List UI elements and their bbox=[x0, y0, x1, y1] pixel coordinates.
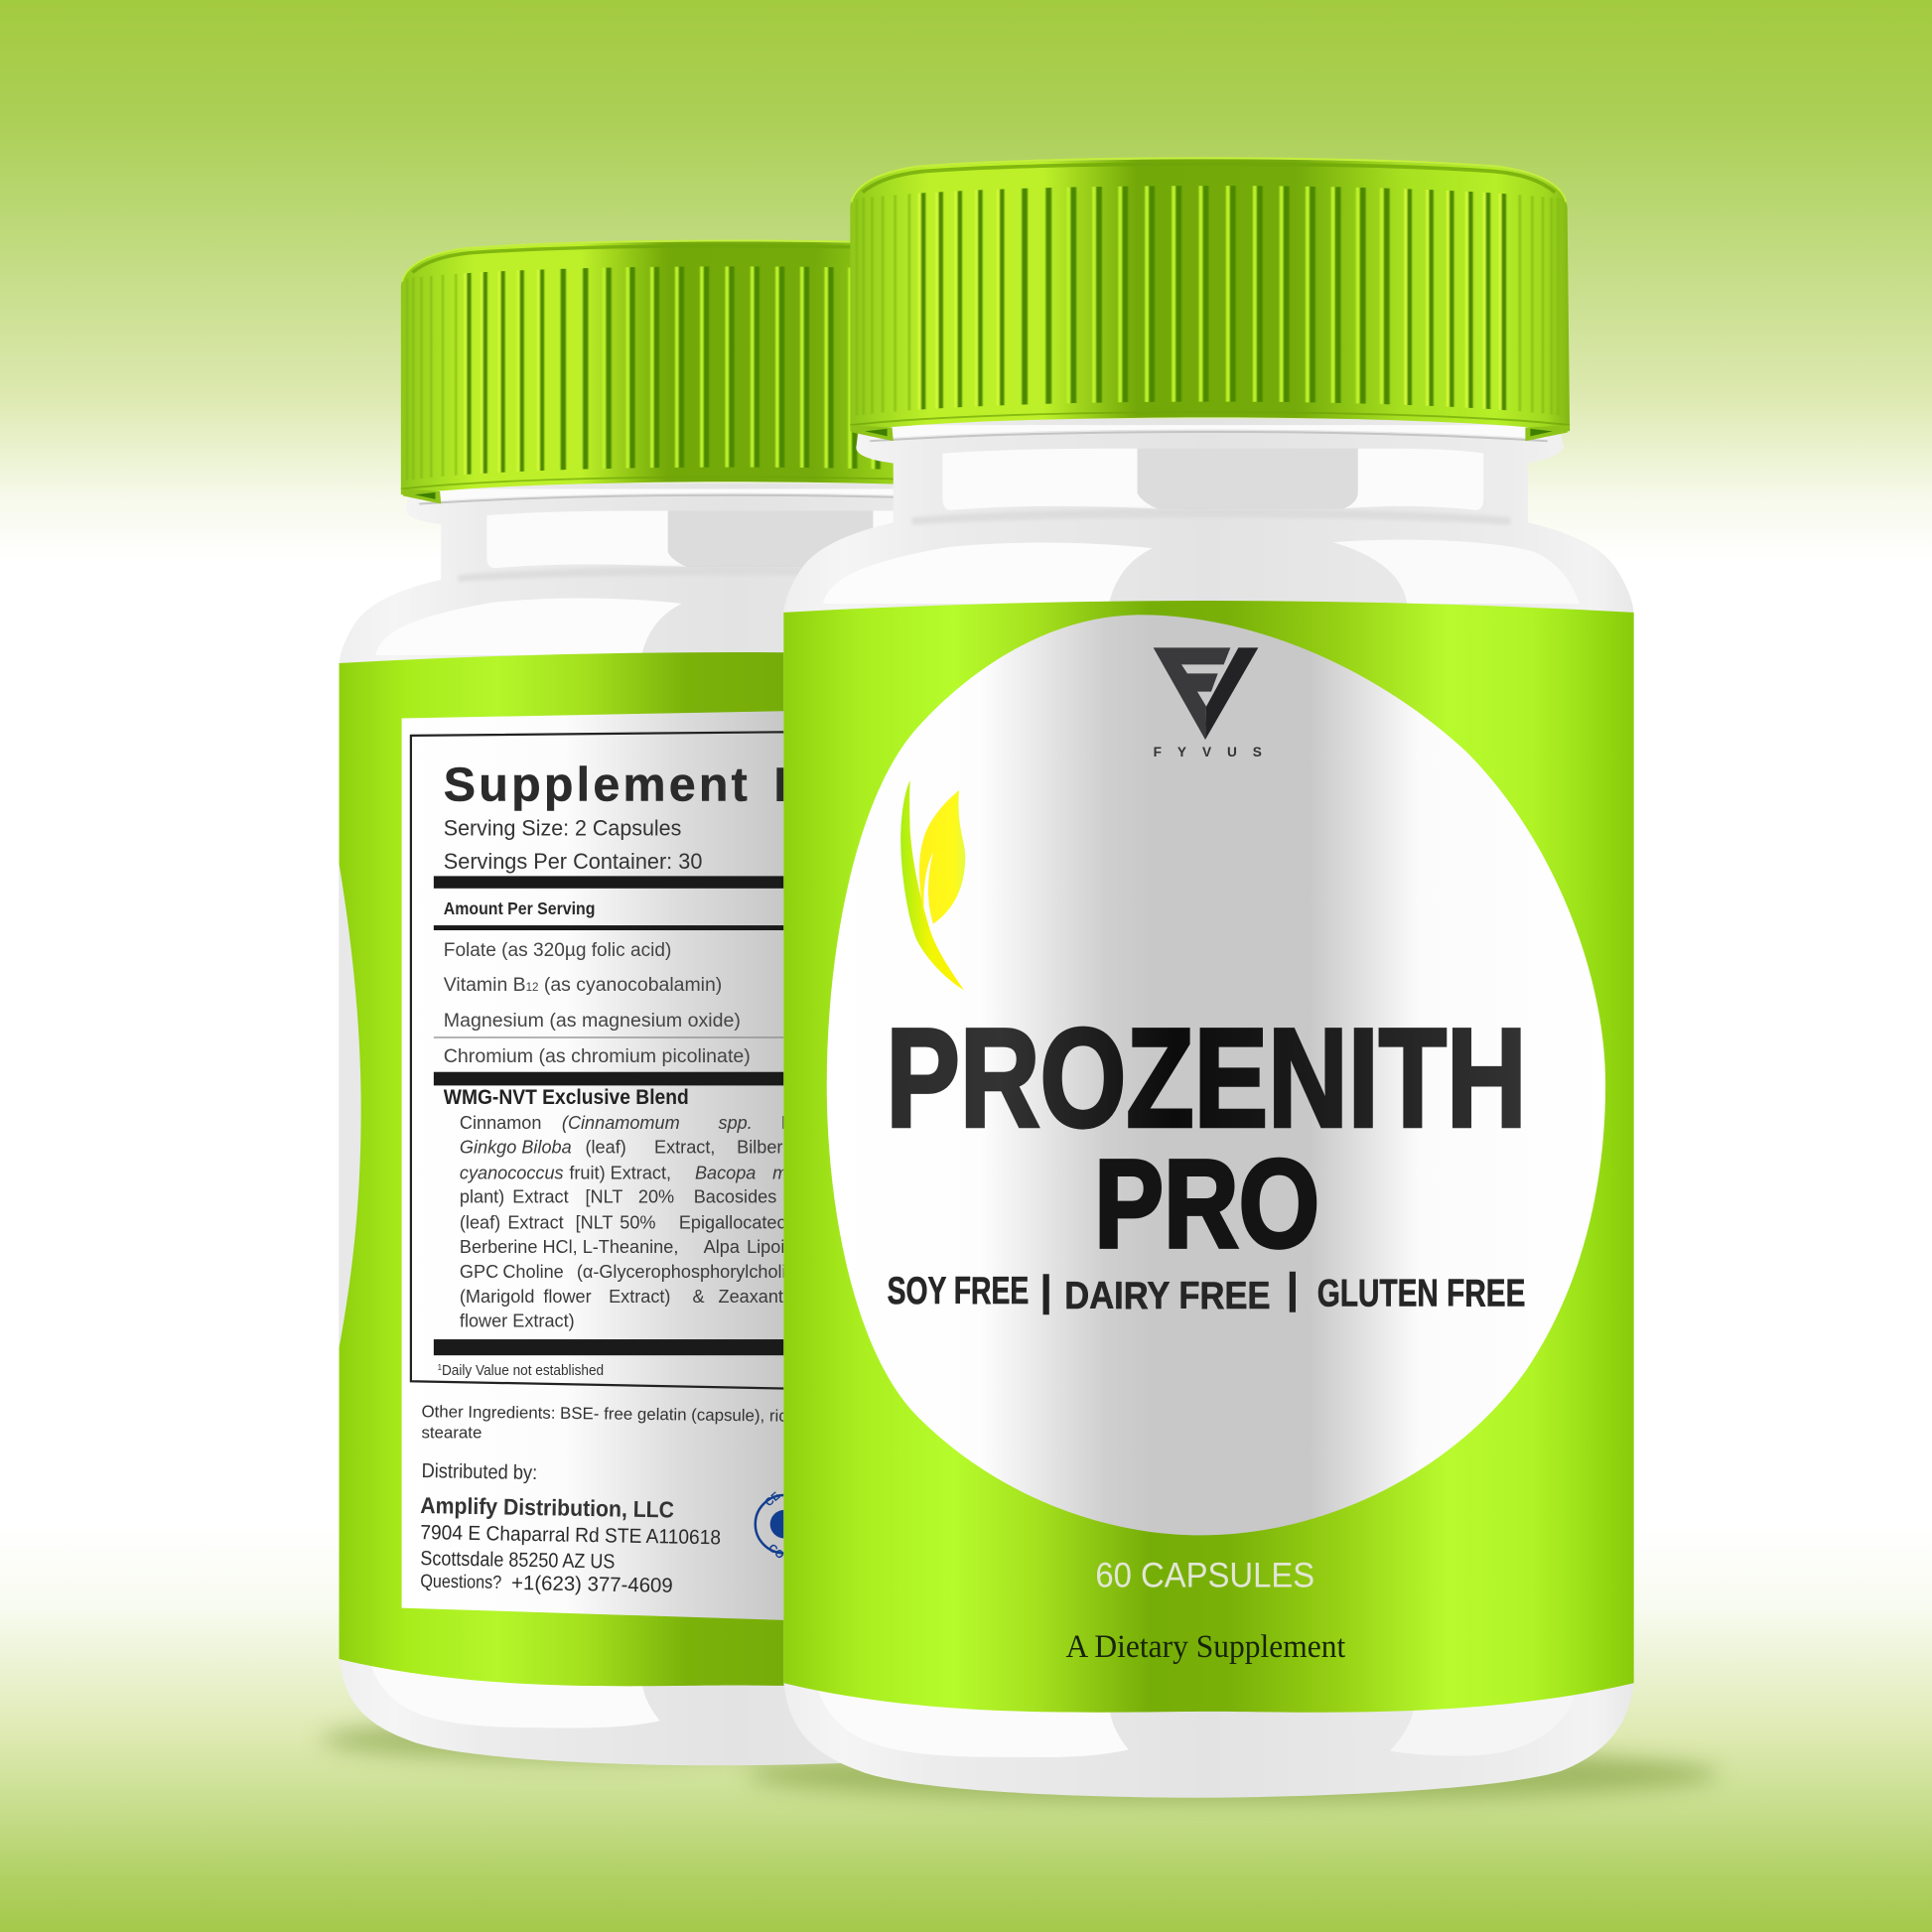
blend ingredients: Choline bbox=[502, 1262, 564, 1282]
back label left white edge bbox=[339, 863, 361, 1349]
front bottle body bbox=[783, 419, 1634, 1798]
other ingredients: Other Ingredients: BSE- free gelatin (capsule), rice flour, magnesium bbox=[421, 1402, 928, 1427]
brand name: FYVUS bbox=[1154, 745, 1262, 759]
blend ingredients: spp. bbox=[719, 1113, 753, 1133]
serving info: Servings Per Container: 30 bbox=[444, 849, 702, 874]
certification seal bbox=[756, 1490, 813, 1562]
blend ingredients: [NLT bbox=[576, 1212, 613, 1232]
blend ingredients: (Marigold bbox=[460, 1287, 534, 1307]
thin rule bbox=[434, 1036, 791, 1038]
blend ingredients: Extract bbox=[781, 1113, 837, 1133]
bottom thick rule bbox=[434, 1339, 791, 1355]
blend ingredients: (leaf) bbox=[460, 1212, 500, 1232]
back bottle bbox=[339, 240, 1130, 1765]
supplement facts box bbox=[411, 732, 794, 1389]
blend ingredients: flower Extract) bbox=[460, 1311, 575, 1331]
back bottle green label bbox=[340, 652, 1130, 1686]
vitamin rows: Folate (as 320µg folic acid) bbox=[444, 939, 671, 961]
address and phone: Scottsdale 85250 AZ US bbox=[420, 1547, 616, 1574]
blend ingredients bbox=[460, 1113, 843, 1331]
blend heading: WMG-NVT Exclusive Blend bbox=[444, 1086, 689, 1109]
back bottle shadow bbox=[321, 1719, 838, 1760]
blend ingredients: fruit) Extract, bbox=[569, 1164, 671, 1183]
free-from claims: SOY FREE bbox=[888, 1270, 1029, 1312]
supplement facts heading: Facts bbox=[773, 759, 915, 812]
serving info bbox=[444, 815, 702, 874]
blend ingredients: 20% bbox=[638, 1186, 674, 1206]
free-from claims bbox=[888, 1270, 1525, 1317]
distributed by: Distributed by: bbox=[421, 1459, 537, 1484]
blend ingredients: Berberine HCl, L-Theanine, bbox=[460, 1237, 678, 1257]
address and phone: 7904 E Chaparral Rd STE A110618 bbox=[420, 1521, 721, 1549]
other ingredients: stearate bbox=[421, 1423, 482, 1442]
address and phone: +1(623) 377-4609 bbox=[511, 1572, 673, 1597]
top thick rule bbox=[434, 876, 791, 889]
certification seal: CO bbox=[765, 1542, 786, 1562]
blend ingredients: Zeaxanthin bbox=[719, 1287, 807, 1307]
company name: Amplify Distribution, LLC bbox=[420, 1492, 674, 1522]
blend ingredients: monnieri bbox=[772, 1164, 843, 1183]
vitamin rows bbox=[444, 939, 751, 1067]
blend ingredients: plant) bbox=[460, 1186, 504, 1206]
front bottle green label bbox=[783, 601, 1634, 1713]
second rule bbox=[434, 925, 791, 930]
free-from claims: GLUTEN FREE bbox=[1317, 1273, 1525, 1315]
dietary supplement line: A Dietary Supplement bbox=[1066, 1628, 1345, 1664]
blend ingredients: & bbox=[692, 1287, 705, 1307]
blend ingredients: GPC bbox=[460, 1262, 498, 1282]
daily value footnote: 1 bbox=[438, 1362, 442, 1372]
blend ingredients: (Cinnamomum bbox=[562, 1113, 680, 1133]
supplement facts heading: Supplement bbox=[444, 759, 751, 812]
vitamin rows: Magnesium (as magnesium oxide) bbox=[444, 1010, 741, 1032]
daily value footnote: Daily Value not established bbox=[442, 1363, 604, 1379]
vitamin rows: Chromium (as chromium picolinate) bbox=[444, 1045, 751, 1067]
blend ingredients: Bacosides bbox=[694, 1186, 776, 1206]
blend ingredients: Extract bbox=[512, 1186, 569, 1206]
blend ingredients: Extract bbox=[507, 1212, 564, 1232]
blend ingredients: 50% bbox=[620, 1212, 656, 1232]
vitamin rows: Vitamin B12 (as cyanocobalamin) bbox=[444, 974, 722, 996]
brand logo bbox=[1154, 647, 1258, 740]
blend ingredients: flower bbox=[543, 1287, 592, 1307]
blend ingredients: Bacopa bbox=[695, 1164, 756, 1183]
title line 2: PRO bbox=[1094, 1133, 1319, 1274]
amount per serving: Amount Per Serving bbox=[444, 898, 595, 918]
front bottle bbox=[783, 158, 1634, 1798]
capsule count: 60 CAPSULES bbox=[1095, 1557, 1314, 1594]
blend ingredients: (leaf) bbox=[586, 1138, 626, 1158]
blend ingredients: cyanococcus bbox=[460, 1164, 564, 1183]
blend ingredients: Ginkgo Biloba bbox=[460, 1138, 572, 1158]
icon: leaf bbox=[900, 780, 965, 990]
blend ingredients: Extract) bbox=[609, 1287, 670, 1307]
supplement panel bbox=[402, 711, 788, 1620]
blend ingredients: Cinnamon bbox=[460, 1113, 541, 1133]
blend ingredients: [NLT bbox=[586, 1186, 622, 1206]
back bottle body bbox=[340, 483, 1130, 1765]
address and phone: Questions? bbox=[420, 1571, 501, 1592]
serving info: Serving Size: 2 Capsules bbox=[444, 815, 681, 840]
certification seal: CE bbox=[763, 1490, 782, 1509]
blend ingredients: Alpa bbox=[704, 1237, 741, 1257]
back bottle cap bbox=[401, 240, 1070, 504]
front bottle shadow bbox=[746, 1747, 1719, 1801]
address and phone bbox=[420, 1521, 721, 1597]
blend ingredients: Lipoic bbox=[747, 1237, 793, 1257]
blend ingredients: Extract, bbox=[654, 1138, 715, 1158]
other ingredients bbox=[421, 1402, 928, 1442]
title line 1: PROZENITH bbox=[886, 999, 1527, 1156]
blend ingredients: Epigallocatechin bbox=[679, 1212, 810, 1232]
front bottle cap bbox=[850, 158, 1570, 441]
free-from claims: DAIRY FREE bbox=[1064, 1275, 1271, 1317]
blend ingredients: Bilberry bbox=[737, 1138, 798, 1158]
blend ingredients: (α-Glycerophosphorylcholine) bbox=[577, 1262, 812, 1282]
third thick rule bbox=[434, 1072, 791, 1085]
white circle panel bbox=[827, 615, 1605, 1535]
